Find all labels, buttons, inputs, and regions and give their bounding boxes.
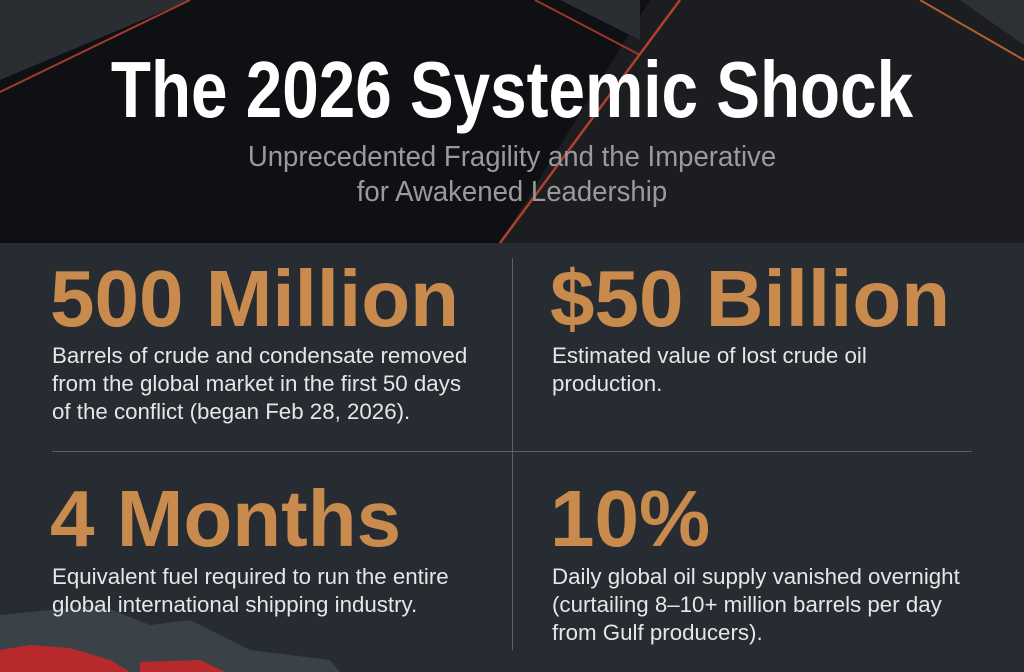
subtitle: Unprecedented Fragility and the Imperative (248, 141, 776, 173)
stat: 4 Months: Equivalent fuel required to run the entire global international shipping industry. (52, 564, 449, 617)
stat: 10% (550, 474, 960, 645)
subtitle: for Awakened Leadership (357, 176, 667, 208)
stat: 50 Billion: $50 Billion (550, 254, 950, 343)
title: The 2026 Systemic Shock (111, 45, 913, 134)
vertical divider (512, 258, 513, 650)
stat: 4 Months: 4 Months (50, 474, 401, 563)
stat: 50 Billion: Estimated value of lost crude oil production. (552, 343, 867, 396)
stat: 500 Million (50, 254, 467, 424)
subtitle (248, 141, 776, 208)
stat: 50 Billion (550, 254, 950, 396)
stat: 4 Months (50, 474, 449, 617)
stat: 10%: 10% (550, 474, 710, 563)
stat: 500 Million: Barrels of crude and condensate removed from the global market in the first 50 days of the conflict (began Feb 28, 2026). (52, 343, 467, 424)
stat: 10%: Daily global oil supply vanished overnight (curtailing 8–10+ million barrels per day from Gulf producers). (552, 564, 960, 645)
horizontal divider (52, 451, 972, 452)
stat: 500 Million: 500 Million (50, 254, 459, 343)
